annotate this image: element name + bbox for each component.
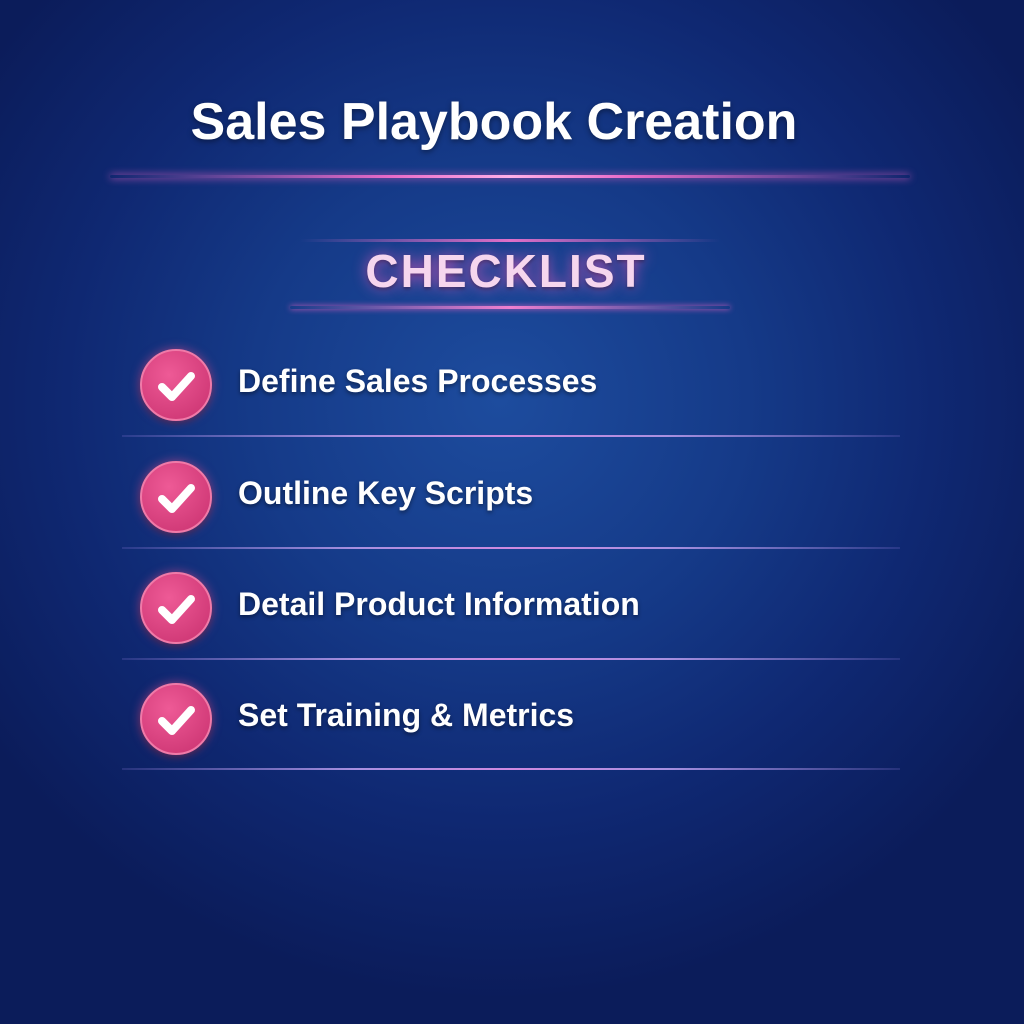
icon: check (140, 683, 212, 755)
icon: check (140, 572, 212, 644)
item 3: Detail Product Information (238, 586, 640, 622)
title: Sales Playbook Creation (191, 93, 797, 151)
item 2: Outline Key Scripts (238, 475, 533, 511)
item 2 (133, 454, 534, 540)
checklist header bottom line (290, 306, 730, 309)
title underline glow (110, 175, 910, 178)
icon: check (140, 461, 212, 533)
checklist header top line (300, 239, 720, 242)
icon: check (140, 349, 212, 421)
checklist heading: CHECKLIST (365, 245, 647, 297)
item 1 (133, 342, 598, 428)
item 1: Define Sales Processes (238, 363, 597, 399)
item 3 (133, 565, 640, 650)
item 4: Set Training & Metrics (238, 697, 574, 733)
item 4 (133, 676, 574, 762)
